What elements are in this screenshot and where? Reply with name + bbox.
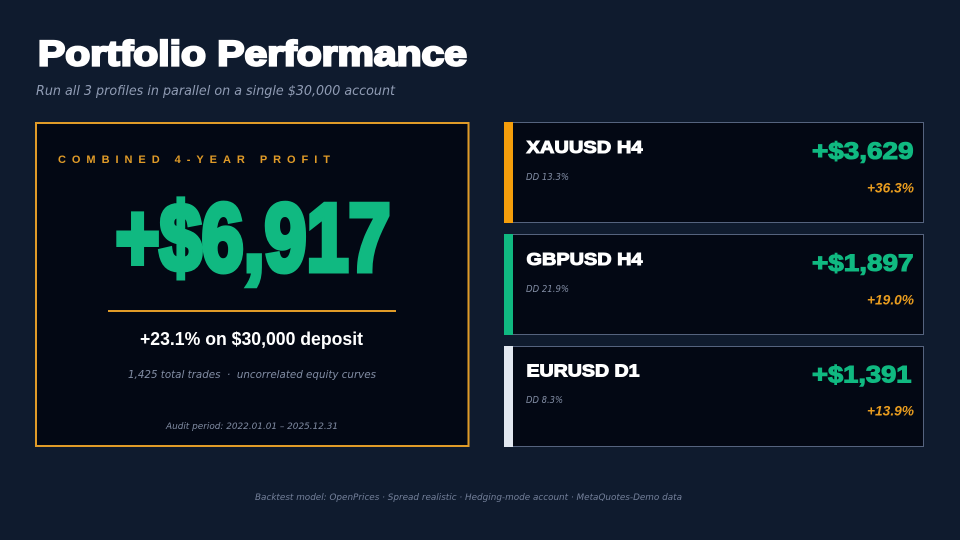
card: XAUUSD H4 bbox=[504, 122, 924, 223]
instrument name: EURUSD D1 bbox=[526, 360, 640, 380]
divider bbox=[108, 310, 396, 312]
panel: combined profit bbox=[36, 123, 468, 446]
return: +19.0% bbox=[867, 292, 915, 308]
footer note: Backtest model: OpenPrices · Spread realistic · Hedging-mode account · MetaQuotes-Demo data bbox=[255, 493, 682, 503]
drawdown: DD 21.9% bbox=[526, 284, 569, 295]
return: +13.9% bbox=[867, 402, 915, 418]
return: +36.3% bbox=[867, 180, 915, 196]
accent bar bbox=[504, 346, 513, 447]
card: GBPUSD H4 bbox=[504, 234, 924, 335]
instrument name: GBPUSD H4 bbox=[526, 249, 643, 269]
big profit number: +$6,917 bbox=[116, 184, 390, 292]
panel label: COMBINED 4-YEAR PROFIT bbox=[58, 154, 330, 166]
profit: +$1,897 bbox=[812, 250, 914, 277]
accent bar bbox=[504, 234, 513, 335]
title: Portfolio Performance bbox=[38, 34, 467, 74]
audit period: Audit period: 2022.01.01 – 2025.12.31 bbox=[165, 422, 338, 432]
subtitle: Run all 3 profiles in parallel on a single $30,000 account bbox=[36, 83, 396, 99]
trades note: 1,425 total trades · uncorrelated equity curves bbox=[128, 369, 377, 381]
drawdown: DD 8.3% bbox=[526, 395, 563, 406]
deposit return: +23.1% on $30,000 deposit bbox=[140, 329, 363, 349]
accent bar bbox=[504, 122, 513, 223]
instrument name: XAUUSD H4 bbox=[526, 137, 643, 157]
drawdown: DD 13.3% bbox=[526, 172, 569, 183]
profit: +$1,391 bbox=[812, 362, 912, 388]
profit: +$3,629 bbox=[812, 138, 914, 165]
card: EURUSD D1 bbox=[504, 346, 924, 447]
